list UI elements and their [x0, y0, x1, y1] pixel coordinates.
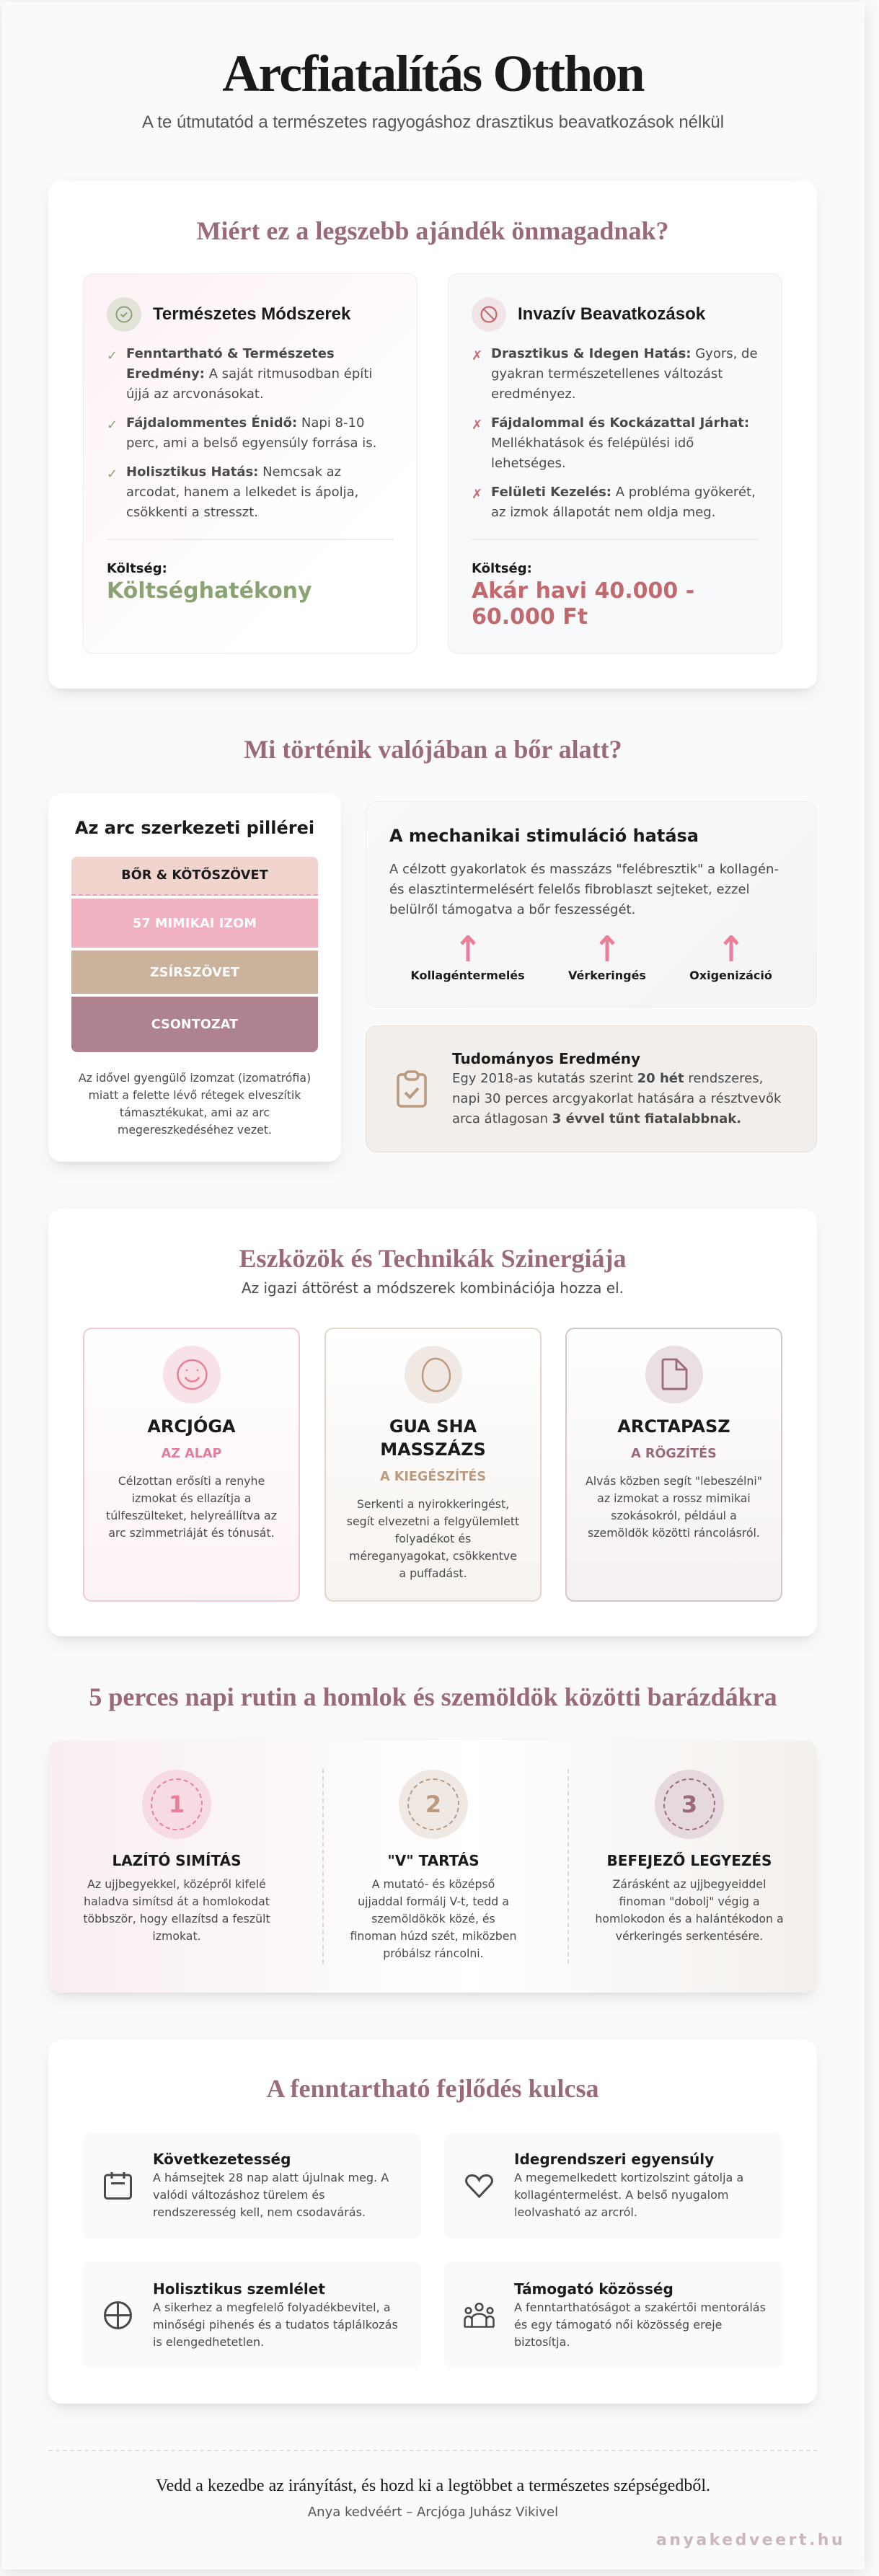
tool card: gua sha — [324, 1328, 542, 1602]
step text: haladva simítsd át a homlokodat — [84, 1894, 270, 1908]
text — [153, 2301, 398, 2349]
icon: clipboard — [397, 1070, 427, 1108]
step text: A mutató- és középső — [372, 1877, 495, 1891]
column heading: Invazív Beavatkozások — [518, 304, 705, 324]
step title: "V" TARTÁS — [387, 1852, 480, 1869]
text: és egy támogató női közösség ereje — [514, 2318, 722, 2332]
text: A hámsejtek 28 nap alatt újulnak meg. A — [153, 2171, 389, 2184]
description: segít elvezetni a felgyülemlett — [347, 1514, 519, 1528]
description: túlfeszülteket, helyreállítva az — [106, 1509, 277, 1522]
text: A megemelkedett kortizolszint gátolja a — [514, 2171, 743, 2184]
cost value: Költséghatékony — [107, 578, 312, 604]
tool card: face patches — [565, 1328, 782, 1602]
list item 1 — [126, 346, 372, 402]
heading: Miért ez a legszebb ajándék önmagadnak? — [196, 216, 668, 245]
description: izmokat és ellazítja a — [132, 1491, 251, 1505]
list item 1: Eredmény: A saját ritmusodban építi — [126, 366, 372, 381]
description: A célzott gyakorlatok és masszázs "felébresztik" a kollagén- — [389, 862, 779, 877]
number badge: 1 — [169, 1791, 185, 1818]
panel: keys to sustainable progress — [48, 2039, 817, 2404]
list item 3: Holisztikus Hatás: Nemcsak az — [126, 464, 341, 480]
icon: arrow up — [723, 935, 739, 961]
name: GUA SHA — [389, 1416, 477, 1437]
text: minőségi pihenés és a tudatos táplálkozás — [153, 2318, 398, 2332]
cost value: 60.000 Ft — [472, 604, 588, 630]
list item 1 — [491, 346, 758, 402]
key: supportive community — [444, 2262, 782, 2368]
text: valódi változáshoz türelem és — [153, 2188, 325, 2202]
cost — [107, 561, 312, 604]
description: a puffadást. — [399, 1566, 467, 1580]
description — [347, 1497, 519, 1580]
cost — [472, 561, 694, 630]
cost value — [472, 578, 694, 630]
step 2 — [350, 1770, 516, 1960]
cost value: Akár havi 40.000 - — [472, 578, 694, 604]
title: Következetesség — [153, 2151, 291, 2168]
description — [452, 1071, 782, 1126]
panel: routine steps — [48, 1740, 817, 1993]
description: belülről támogatva a bőr feszességét. — [389, 902, 635, 917]
role: A KIEGÉSZÍTÉS — [380, 1470, 486, 1484]
list item 3: arcodat, hanem a lelkedet is ápolja, — [126, 485, 358, 500]
list item 2 — [491, 415, 749, 471]
cross mark: ✗ — [472, 418, 482, 433]
number badge — [142, 1770, 211, 1839]
label: Oxigenizáció — [689, 969, 772, 982]
description: napi 30 perces arcgyakorlat hatására a résztvevők — [452, 1091, 781, 1106]
text: kollagéntermelést. A belső nyugalom — [514, 2188, 728, 2202]
description: arc szimmetriáját és tónusát. — [108, 1526, 275, 1540]
layer: fat — [71, 950, 318, 994]
icon: arrow up — [460, 935, 476, 961]
panel: scientific result — [366, 1025, 817, 1152]
number badge — [399, 1770, 468, 1839]
label: Vérkeringés — [568, 969, 646, 982]
step text — [350, 1877, 516, 1960]
check mark: ✓ — [107, 418, 118, 433]
key: holistic approach — [83, 2262, 421, 2368]
panel: why this is the best gift — [48, 181, 817, 689]
icon: globe cross — [104, 2301, 132, 2329]
credit: Anya kedvéért – Arcjóga Juhász Vikivel — [308, 2505, 558, 2520]
number badge: 2 — [425, 1791, 441, 1818]
step text: homlokodon és a halántékodon a — [595, 1912, 784, 1926]
list item 3: csökkenti a stresszt. — [126, 505, 258, 520]
icon: calendar — [104, 2172, 132, 2200]
icon: smile — [163, 1346, 221, 1403]
list item 3: Felületi Kezelés: A probléma gyökerét, — [491, 485, 756, 500]
description — [79, 1071, 311, 1137]
description: Az idővel gyengülő izomzat (izomatrófia) — [79, 1071, 311, 1085]
panel: natural methods — [83, 273, 418, 653]
header — [142, 45, 724, 132]
description: támasztékukat, ami az arc — [120, 1106, 270, 1119]
layer: skin — [71, 857, 318, 896]
text: leolvasható az arcról. — [514, 2205, 637, 2219]
layer: bone — [71, 997, 318, 1052]
text: A fenntarthatóságot a szakértői mentorálás — [514, 2301, 766, 2314]
heading: under the skin: Mi történik valójában a bőr alatt? — [244, 735, 622, 764]
cross mark: ✗ — [472, 348, 482, 363]
tool card: face yoga — [83, 1328, 300, 1602]
description: szokásokról, például a — [611, 1509, 737, 1522]
layer: bone: CSONTOZAT — [151, 1018, 238, 1032]
step text: finoman "dobolj" végig a — [619, 1894, 760, 1908]
step text: finoman húzd szét, miközben — [350, 1929, 516, 1943]
stat: circulation — [568, 935, 646, 982]
title: Idegrendszeri egyensúly — [514, 2151, 714, 2168]
step text — [83, 1877, 270, 1943]
description: méreganyagokat, csökkentve — [349, 1549, 517, 1563]
title: Támogató közösség — [514, 2280, 673, 2298]
icon: gua sha stone — [404, 1346, 461, 1403]
panel: invasive treatments — [448, 273, 782, 653]
name: ARCTAPASZ — [617, 1416, 730, 1437]
description: az izmokat a rossz mimikai — [597, 1491, 751, 1505]
list item 1: gyakran természetellenes változást — [491, 366, 723, 381]
icon: people — [464, 2303, 495, 2328]
description: folyadékot és — [395, 1532, 471, 1545]
heading: Az arc szerkezeti pillérei — [75, 818, 314, 838]
description: megereszkedéséhez vezet. — [118, 1123, 272, 1137]
subtitle: A te útmutatód a természetes ragyogáshoz drasztikus beavatkozások nélkül — [142, 113, 724, 132]
closing message: Vedd a kezedbe az irányítást, és hozd ki a legtöbbet a természetes szépségedből. — [156, 2476, 710, 2495]
step title: LAZÍTÓ SIMÍTÁS — [112, 1852, 241, 1869]
layer: fat: ZSÍRSZÖVET — [150, 966, 239, 980]
list item 3: az izmok állapotát nem oldja meg. — [491, 505, 715, 520]
panel: structural pillars — [48, 793, 341, 1162]
description: Serkenti a nyirokkeringést, — [357, 1497, 509, 1511]
list item 1: Fenntartható & Természetes — [126, 346, 335, 361]
stat: collagen — [410, 935, 525, 982]
column heading: Természetes Módszerek — [153, 304, 350, 324]
list item 2 — [126, 415, 376, 451]
step text: izmokat. — [152, 1929, 201, 1943]
step text: próbálsz ráncolni. — [383, 1946, 484, 1960]
text — [514, 2299, 766, 2351]
list item 1: újjá az arcvonásokat. — [126, 387, 264, 402]
description: és elasztintermelésért felelős fibroblaszt sejteket, ezzel — [389, 882, 750, 897]
text: rendszeresség kell, nem csodavárás. — [153, 2205, 366, 2219]
name — [380, 1416, 486, 1460]
panel: tools and techniques — [48, 1209, 817, 1636]
text — [153, 2171, 389, 2219]
cost label: Költség: — [107, 561, 167, 576]
description: Célzottan erősíti a renyhe — [118, 1474, 265, 1488]
check mark: ✓ — [107, 348, 118, 363]
step text: ujjaddal formálj V-t, tedd a — [358, 1894, 509, 1908]
list item 2: perc, ami a belső egyensúly forrása is. — [126, 436, 376, 451]
heading: Tudományos Eredmény — [452, 1050, 640, 1067]
role: A RÖGZÍTÉS — [631, 1447, 717, 1461]
step text: vérkeringés serkentésére. — [616, 1929, 763, 1943]
step text: Zárásként az ujjbegyeiddel — [613, 1877, 766, 1891]
number badge — [655, 1770, 724, 1839]
key: nervous system balance — [444, 2132, 782, 2238]
icon: heart — [465, 2174, 493, 2198]
title: Holisztikus szemlélet — [153, 2280, 325, 2298]
number badge: 3 — [681, 1791, 697, 1818]
list item 3 — [491, 485, 756, 520]
check mark: ✓ — [107, 467, 118, 482]
heading: Eszközök és Technikák Szinergiája — [239, 1244, 627, 1273]
layer: muscle: 57 MIMIKAI IZOM — [133, 917, 257, 931]
footer — [1, 2474, 865, 2524]
label: Kollagéntermelés — [410, 969, 525, 982]
description — [586, 1474, 762, 1540]
list item 2: Fájdalommal és Kockázattal Járhat: — [491, 415, 749, 431]
heading: A fenntartható fejlődés kulcsa — [267, 2074, 598, 2103]
description: miatt a felette lévő rétegek elveszítik — [89, 1088, 301, 1102]
step text: többször, hogy ellazítsd a feszült — [83, 1912, 270, 1926]
description — [106, 1474, 277, 1540]
icon: arrow up — [599, 935, 615, 961]
panel: mechanical stimulation — [366, 801, 817, 1007]
description: Egy 2018-as kutatás szerint 20 hét rendszeres, — [452, 1071, 763, 1086]
list item 1: eredményez. — [491, 387, 575, 402]
text: is elengedhetetlen. — [153, 2335, 264, 2349]
description: arca átlagosan 3 évvel tűnt fiatalabbnak. — [452, 1111, 741, 1126]
subheading: Az igazi áttörést a módszerek kombinációja hozza el. — [242, 1279, 624, 1297]
step text: szemöldökök közé, és — [371, 1912, 495, 1926]
name: MASSZÁZS — [380, 1439, 486, 1460]
text: A sikerhez a megfelelő folyadékbevitel, a — [153, 2301, 391, 2314]
role: AZ ALAP — [162, 1447, 221, 1461]
layer: skin: BŐR & KÖTŐSZÖVET — [121, 868, 268, 883]
description: Alvás közben segít "lebeszélni" — [586, 1474, 762, 1488]
name: ARCJÓGA — [147, 1416, 236, 1437]
text: biztosítja. — [514, 2335, 570, 2349]
step title: BEFEJEZŐ LEGYEZÉS — [607, 1852, 772, 1869]
watermark: anyakedveert.hu — [656, 2531, 845, 2549]
cost label: Költség: — [472, 561, 532, 576]
list item 2: Fájdalommentes Énidő: Napi 8-10 — [126, 415, 364, 431]
text — [514, 2171, 743, 2219]
step text: Az ujjbegyekkel, középről kifelé — [87, 1877, 266, 1891]
list item 1: Drasztikus & Idegen Hatás: Gyors, de — [491, 346, 758, 361]
stat: oxygenation — [689, 935, 772, 982]
step text — [595, 1877, 784, 1943]
layer stack diagram — [71, 857, 318, 1052]
cross mark: ✗ — [472, 487, 482, 502]
list item 3 — [126, 464, 358, 520]
list item 2: lehetséges. — [491, 456, 566, 471]
key: consistency — [83, 2132, 421, 2238]
title: Arcfiatalítás Otthon — [222, 45, 644, 102]
heading: A mechanikai stimuláció hatása — [389, 826, 699, 846]
description: szemöldök közötti ráncolásról. — [588, 1526, 760, 1540]
list item 2: Mellékhatások és felépülési idő — [491, 436, 694, 451]
icon: patch sheet — [645, 1346, 702, 1403]
icon: check circle — [107, 297, 141, 332]
icon: prohibited — [472, 297, 506, 332]
description — [389, 862, 779, 917]
step 3 — [595, 1770, 784, 1943]
layer: muscle — [71, 899, 318, 948]
heading: daily routine: 5 perces napi rutin a homlok és szemöldök közötti barázdákra — [89, 1682, 777, 1711]
step 1 — [83, 1770, 270, 1943]
